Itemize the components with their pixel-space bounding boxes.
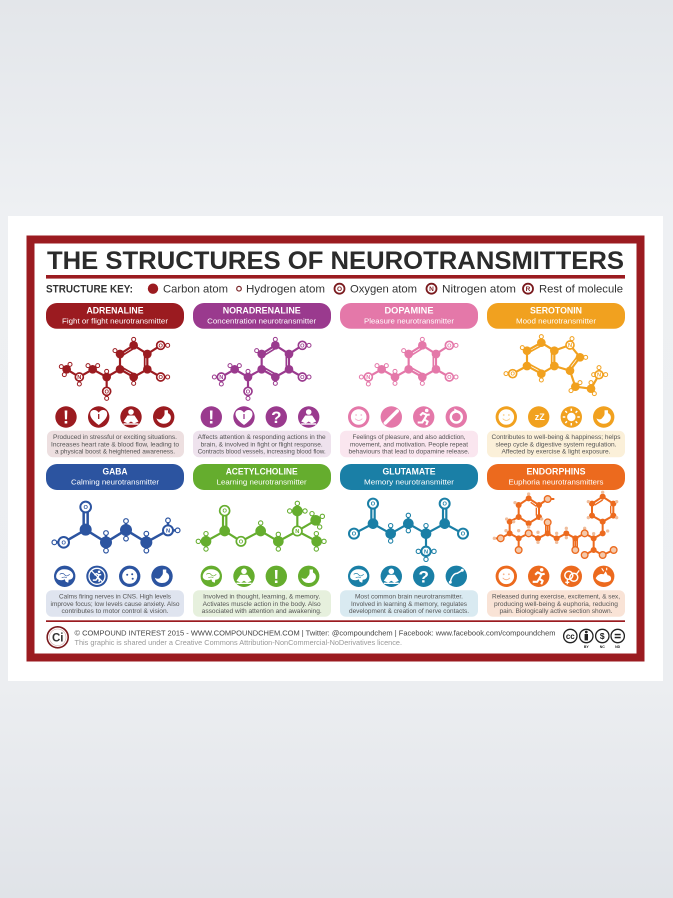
description: gaba (46, 590, 184, 617)
icon: needle (381, 406, 402, 428)
icon: stomach (593, 406, 614, 428)
heading pill: noradrenaline: Concentration neurotransmitter (207, 316, 317, 325)
icon: question: ? (271, 408, 281, 427)
molecule: glutamate: O (442, 502, 447, 508)
key: rest of molecule: Rest of molecule (539, 284, 623, 296)
footer rule (46, 620, 625, 622)
icon: meditating person (233, 566, 255, 587)
molecule: noradrenaline: O (300, 375, 305, 381)
heading pill: glutamate: Memory neurotransmitter (364, 477, 455, 486)
red frame (30, 240, 640, 658)
title: THE STRUCTURES OF NEUROTRANSMITTERS (47, 248, 624, 275)
description: noradrenaline: brain, & involved in fight or flight response. (201, 441, 323, 448)
molecule: gaba: O (83, 505, 88, 511)
icon: alert: ! (208, 408, 214, 428)
icon: heart (233, 406, 255, 428)
molecule: serotonin: N (568, 343, 572, 349)
heading pill: endorphins: ENDORPHINS (526, 466, 586, 476)
icon: alert (266, 566, 287, 587)
description: glutamate (340, 590, 478, 617)
panel: adrenaline (46, 303, 184, 457)
icon: alert: ! (63, 408, 69, 428)
molecule: adrenaline (59, 337, 170, 400)
description: acetylcholine (193, 590, 331, 617)
heading pill: gaba: GABA (102, 466, 128, 476)
icon: alert: ! (273, 567, 279, 587)
icon: sleep (528, 406, 549, 428)
heading pill: adrenaline: ADRENALINE (86, 305, 144, 315)
description: dopamine: movement, and motivation. People repeat (350, 441, 468, 448)
molecule: glutamate: O (371, 502, 376, 508)
description: noradrenaline (193, 431, 331, 457)
structure key: STRUCTURE KEY: (46, 284, 133, 296)
description: dopamine: Feelings of pleasure, and also addiction, (352, 434, 466, 441)
molecule: gaba: O (61, 540, 66, 546)
heading pill: glutamate (340, 464, 478, 490)
icon: pain relief (593, 566, 614, 587)
footer logo (47, 627, 68, 648)
icon: gender symbols (561, 566, 582, 587)
heading pill: endorphins (487, 464, 625, 490)
description: acetylcholine: Involved in thought, learning, & memory. (203, 594, 320, 601)
icon: brain (348, 566, 369, 587)
icon: smile (496, 566, 517, 587)
icon: question (266, 406, 287, 428)
icon: stressed person (120, 406, 142, 428)
heading pill: dopamine: DOPAMINE (384, 305, 434, 315)
heading pill: acetylcholine (193, 464, 331, 490)
icon: stomach (153, 406, 174, 428)
heading pill: gaba: Calming neurotransmitter (71, 477, 160, 486)
icon: meditating person (298, 406, 319, 428)
creative commons badges: NC (600, 645, 605, 649)
molecule: acetylcholine: N (295, 529, 299, 535)
footer logo: Ci (52, 632, 63, 644)
description: adrenaline (47, 431, 184, 457)
description: dopamine: behaviours that lead to dopamine release. (348, 449, 470, 456)
icon: heart (88, 406, 109, 428)
description: serotonin: sleep cycle & digestive system regulation. (496, 441, 617, 448)
heading pill: acetylcholine: Learning neurotransmitter (217, 477, 307, 486)
title rule (46, 275, 625, 279)
structure key (46, 284, 623, 296)
molecule: noradrenaline: O (300, 343, 305, 349)
heading pill: serotonin: SEROTONIN (530, 305, 582, 315)
description: serotonin (487, 431, 625, 457)
icon: sun (561, 406, 582, 428)
heading pill: serotonin (487, 303, 625, 329)
molecule: glutamate: O (352, 532, 357, 538)
panel: noradrenaline (193, 303, 331, 457)
icon: alert (55, 406, 77, 428)
description: noradrenaline: Affects attention & responding actions in the (198, 434, 326, 441)
icon: no running (86, 566, 108, 587)
icon: stomach (298, 566, 319, 587)
description: gaba: improve focus; low levels cause anxiety. Also (50, 601, 180, 608)
icon: smile (496, 406, 517, 428)
description: endorphins: Released during exercise, excitement, & sex, (492, 594, 620, 601)
panel: dopamine (340, 303, 478, 457)
description: glutamate: development & creation of nerve contacts. (349, 608, 469, 615)
molecule: dopamine (359, 337, 458, 386)
description: noradrenaline: Contracts blood vessels, increasing blood flow. (198, 449, 326, 456)
heading pill: endorphins: Euphoria neurotransmitters (508, 477, 604, 486)
panel: glutamate (340, 464, 478, 617)
icon: brain (201, 566, 222, 587)
key: nitrogen: N (429, 286, 434, 293)
molecule: adrenaline: O (158, 375, 163, 381)
molecule: acetylcholine: O (239, 539, 244, 545)
molecule: acetylcholine (196, 501, 326, 551)
description: endorphins (487, 590, 625, 617)
description: gaba: Calms firing nerves in CNS. High levels (59, 594, 171, 601)
key: nitrogen: Nitrogen atom (442, 284, 516, 296)
description: acetylcholine: Activates muscle action in the body. Also (203, 601, 321, 608)
panel: serotonin (487, 303, 625, 457)
description: endorphins: pain. Biologically active section shown. (500, 608, 613, 615)
molecule: dopamine: O (447, 343, 452, 349)
icon: question (413, 566, 434, 587)
molecule: noradrenaline: O (246, 389, 251, 395)
molecule: glutamate: N (424, 549, 428, 555)
footer licence: This graphic is shared under a Creative Commons Attribution-NonCommercial-NoDerivatives licence. (74, 638, 402, 647)
description: dopamine (340, 431, 478, 457)
description: acetylcholine: associated with attention and awakening. (202, 608, 322, 615)
heading pill: acetylcholine: ACETYLCHOLINE (226, 466, 298, 476)
molecule: noradrenaline (212, 337, 311, 400)
panel: endorphins (487, 464, 625, 617)
molecule: glutamate: O (461, 532, 466, 538)
description: serotonin: Affected by exercise & light exposure. (502, 449, 611, 456)
poster sheet (8, 216, 663, 681)
molecule: noradrenaline: N (219, 375, 223, 381)
icon: runner (528, 566, 549, 587)
description: glutamate: Most common brain neurotransmitter. (355, 594, 463, 601)
heading pill: noradrenaline: NORADRENALINE (223, 305, 301, 315)
creative commons badges: ND (615, 645, 621, 649)
heading pill: dopamine: Pleasure neurotransmitter (364, 316, 455, 325)
heading pill: glutamate: GLUTAMATE (382, 466, 436, 476)
description: gaba: contributes to motor control & vision. (62, 608, 169, 615)
description: serotonin: Contributes to well-being & happiness; helps (492, 434, 620, 441)
molecule: dopamine: N (366, 375, 370, 381)
description: adrenaline: Increases heart rate & blood flow, leading to (51, 441, 180, 448)
description: adrenaline: a physical boost & heightened awareness. (55, 449, 175, 456)
molecule: dopamine: O (447, 375, 452, 381)
molecule: serotonin: N (597, 373, 601, 379)
molecule: adrenaline: O (104, 389, 109, 395)
panel: gaba (46, 464, 184, 617)
key: carbon: Carbon atom (163, 284, 228, 296)
molecule: endorphins (493, 491, 618, 558)
molecule: serotonin (504, 335, 608, 396)
icon: brain (54, 566, 75, 587)
footer credits: © COMPOUND INTEREST 2015 - WWW.COMPOUNDCHEM.COM | Twitter: @compoundchem | Facebook: www.facebook.com/compoundchem (74, 629, 556, 638)
icon: question: ? (419, 567, 429, 586)
molecule: serotonin: O (510, 372, 515, 378)
heading pill: adrenaline: Fight or flight neurotransmitter (62, 316, 169, 325)
key: hydrogen: Hydrogen atom (246, 284, 325, 296)
creative commons badges: $ (600, 631, 605, 641)
key: oxygen: O (337, 286, 342, 293)
icon: face (119, 566, 140, 587)
icon: meditating person (381, 566, 402, 587)
icon: nerve contact (446, 566, 467, 587)
molecule: glutamate (349, 499, 468, 561)
icon: stomach (151, 566, 173, 587)
description: adrenaline: Produced in stressful or exciting situations. (53, 434, 177, 441)
heading pill: adrenaline (46, 303, 184, 329)
panel: acetylcholine (193, 464, 331, 617)
molecule: adrenaline: N (77, 375, 81, 381)
molecule: gaba (52, 502, 180, 553)
molecule: gaba: N (166, 528, 170, 534)
description: glutamate: Involved in learning & memory, regulates (351, 601, 467, 608)
icon: cycle (446, 406, 467, 428)
key: oxygen: Oxygen atom (350, 284, 417, 296)
heading pill: gaba (46, 464, 184, 490)
icon: runner (413, 406, 434, 428)
heading pill: serotonin: Mood neurotransmitter (516, 316, 597, 325)
creative commons badges: BY (584, 645, 589, 649)
heading pill: dopamine (340, 303, 478, 329)
icon: sleep: zZ (535, 412, 545, 422)
creative commons badges: cc (566, 632, 575, 641)
icon: alert (201, 406, 222, 428)
key: rest of molecule: R (526, 286, 531, 293)
icon: smile (348, 406, 369, 428)
description: endorphins: producing well-being & euphoria, reducing (494, 601, 619, 608)
heading pill: noradrenaline (193, 303, 331, 329)
creative commons badges (564, 629, 624, 649)
molecule: adrenaline: O (158, 343, 163, 349)
molecule: acetylcholine: O (222, 509, 227, 515)
